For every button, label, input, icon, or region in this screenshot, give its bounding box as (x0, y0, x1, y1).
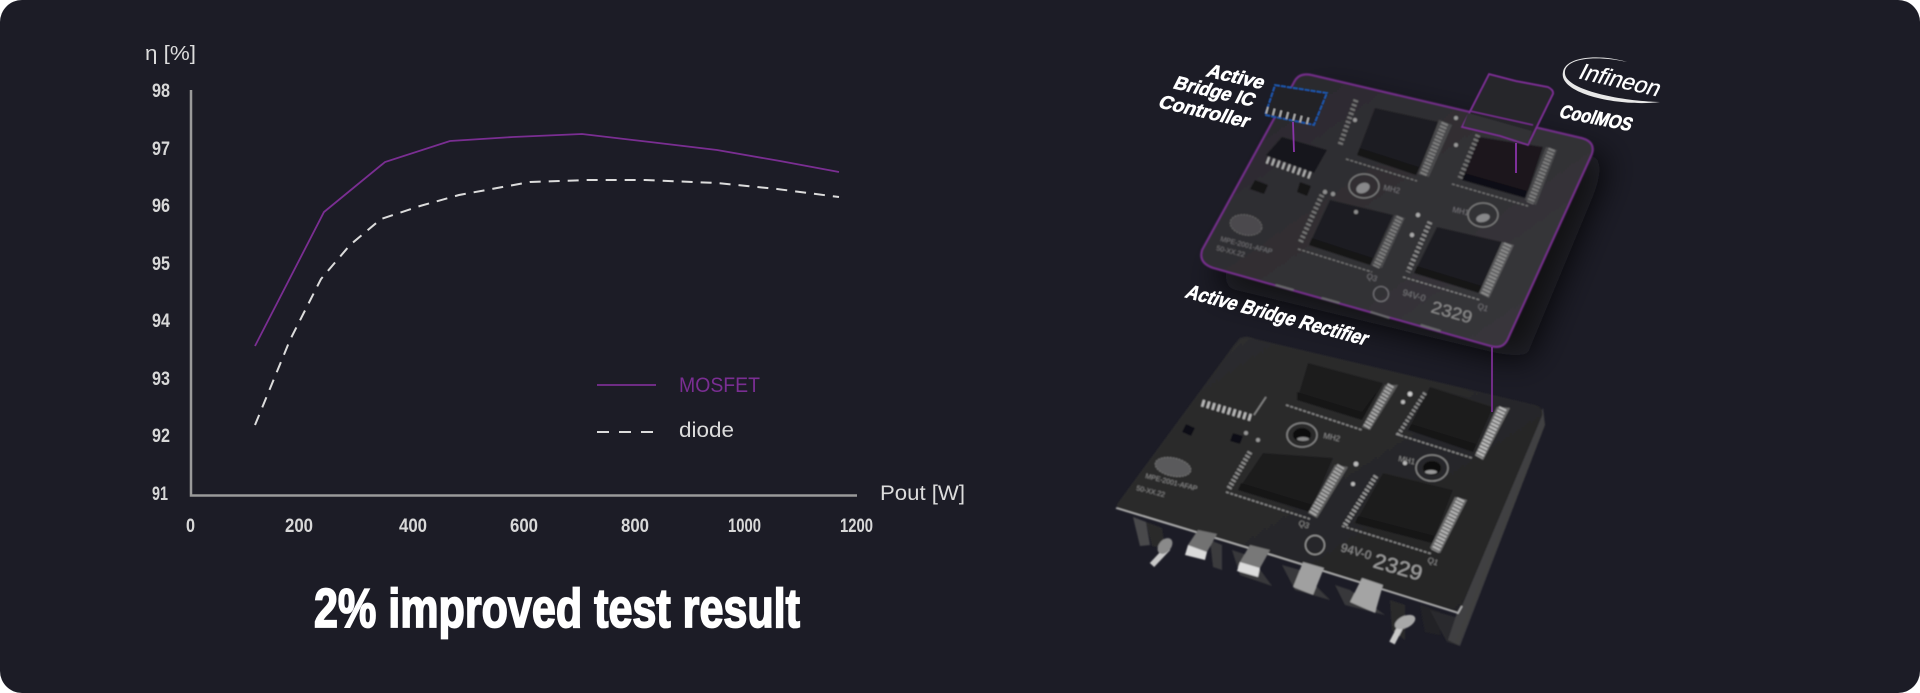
silkscreen labels: MPE-2001-AFAP (1220, 236, 1273, 256)
board logo (1228, 212, 1264, 238)
x axis tick labels (186, 516, 873, 537)
lower circuit board (1117, 337, 1542, 612)
mounting hole MH1 (1468, 203, 1498, 227)
silkscreen labels: MH1 (1398, 454, 1417, 467)
y axis tick labels (152, 81, 170, 505)
silkscreen labels: Q3 (1297, 518, 1311, 531)
upper board assembly (1201, 74, 1593, 347)
x axis title: Pout [W] (880, 482, 965, 505)
silkscreen labels: 2329 (1429, 298, 1475, 327)
silkscreen labels: 50-XX.22 (1216, 245, 1246, 259)
board edge tabs (1275, 284, 1441, 332)
power MOSFET chip bottom right (1342, 473, 1467, 554)
label: CoolMOS: CoolMOS (1556, 102, 1636, 136)
y axis tick labels: 94 (152, 311, 170, 332)
silkscreen labels (1216, 183, 1490, 327)
UL certification mark (1306, 536, 1324, 554)
silkscreen labels: Q1 (1476, 301, 1490, 314)
board connector line (1491, 347, 1493, 412)
small components (1182, 392, 1412, 486)
efficiency line chart (145, 43, 965, 537)
silkscreen labels: MH1 (1452, 205, 1471, 218)
x axis tick labels: 400 (399, 516, 427, 537)
mounting hole MH2 (1349, 174, 1379, 198)
bridge controller IC pins (1202, 397, 1266, 418)
y axis tick labels: 93 (152, 369, 170, 390)
silkscreen labels: 94V-0 (1339, 540, 1373, 563)
upper circuit board with purple outline (1201, 74, 1593, 347)
legend: diode (597, 419, 734, 442)
silkscreen labels: MH2 (1383, 183, 1402, 196)
y axis tick labels: 97 (152, 139, 170, 160)
silkscreen labels: 94V-0 (1401, 287, 1427, 303)
floating controller IC with blue outline (1265, 85, 1327, 125)
x axis tick labels: 200 (285, 516, 313, 537)
small components (1250, 116, 1458, 237)
board logo (1154, 454, 1192, 480)
mounting screw left (1152, 535, 1175, 565)
MOSFET curve (255, 134, 839, 346)
heat sink fins and front shadow (1133, 517, 1460, 646)
power MOSFET chip bottom left (1226, 452, 1348, 519)
CoolMOS connector line (1515, 143, 1517, 173)
power MOSFET chip Q1 (1403, 222, 1514, 300)
y axis tick labels: 96 (152, 196, 170, 217)
legend: diode: diode (679, 419, 734, 442)
upper board drop shadow (1215, 95, 1608, 360)
y axis tick labels: 91 (152, 484, 168, 505)
x axis tick labels: 1000 (728, 516, 761, 537)
floating CoolMOS chip with purple outline (1462, 74, 1553, 145)
heat sink side wall (1448, 408, 1545, 646)
silkscreen labels: 2329 (1371, 550, 1425, 586)
controller IC on board (1266, 137, 1327, 176)
silkscreen labels: 50-XX.22 (1136, 485, 1166, 499)
y axis title: η [%] (145, 43, 196, 65)
UL certification mark (1374, 286, 1388, 302)
mounting hole MH2 (1287, 423, 1317, 447)
power MOSFET chip top left (1286, 363, 1398, 430)
silkscreen labels: Q1 (1426, 555, 1440, 568)
diode curve (255, 180, 839, 425)
legend: MOSFET: MOSFET (679, 374, 760, 397)
y axis tick labels: 95 (152, 254, 170, 275)
mounting hole MH1 (1416, 455, 1448, 481)
result headline: 2% improved test result (314, 577, 800, 639)
label: Active Bridge IC Controller (1155, 62, 1269, 132)
silkscreen labels: MPE-2001-AFAP (1145, 473, 1198, 493)
label: Active Bridge IC Controller: Active (1203, 62, 1269, 94)
x axis tick labels: 1200 (840, 516, 873, 537)
mounting screw right (1392, 612, 1418, 643)
power MOSFET chip Q2 (1452, 135, 1557, 206)
x axis tick labels: 800 (621, 516, 649, 537)
chart axes (191, 90, 857, 496)
silkscreen labels: Q3 (1365, 271, 1379, 284)
controller IC connector line (1293, 122, 1294, 152)
lower board assembly (1116, 337, 1545, 646)
power terminal 1 (1185, 530, 1217, 560)
label: Active Bridge IC Controller: Bridge IC (1170, 74, 1259, 111)
power terminal 4 (1350, 578, 1383, 613)
silkscreen labels: MH2 (1323, 431, 1342, 444)
silkscreen labels (1136, 431, 1440, 586)
power MOSFET chip Q3 (1298, 195, 1405, 272)
power MOSFET chip Q4 (1340, 100, 1452, 181)
y axis tick labels: 92 (152, 426, 170, 447)
y axis tick labels: 98 (152, 81, 170, 102)
power terminal 3 (1293, 562, 1324, 595)
x axis tick labels: 0 (186, 516, 195, 537)
board front edge (1116, 508, 1462, 613)
label: Active Bridge IC Controller: Controller (1155, 93, 1254, 132)
power MOSFET chip top right (1396, 387, 1510, 460)
power terminal 2 (1237, 545, 1270, 577)
x axis tick labels: 600 (510, 516, 538, 537)
icon: Infineon logo: Infineon (1575, 59, 1667, 101)
label: Active Bridge Rectifier: Active Bridge Rectifier (1182, 282, 1373, 350)
